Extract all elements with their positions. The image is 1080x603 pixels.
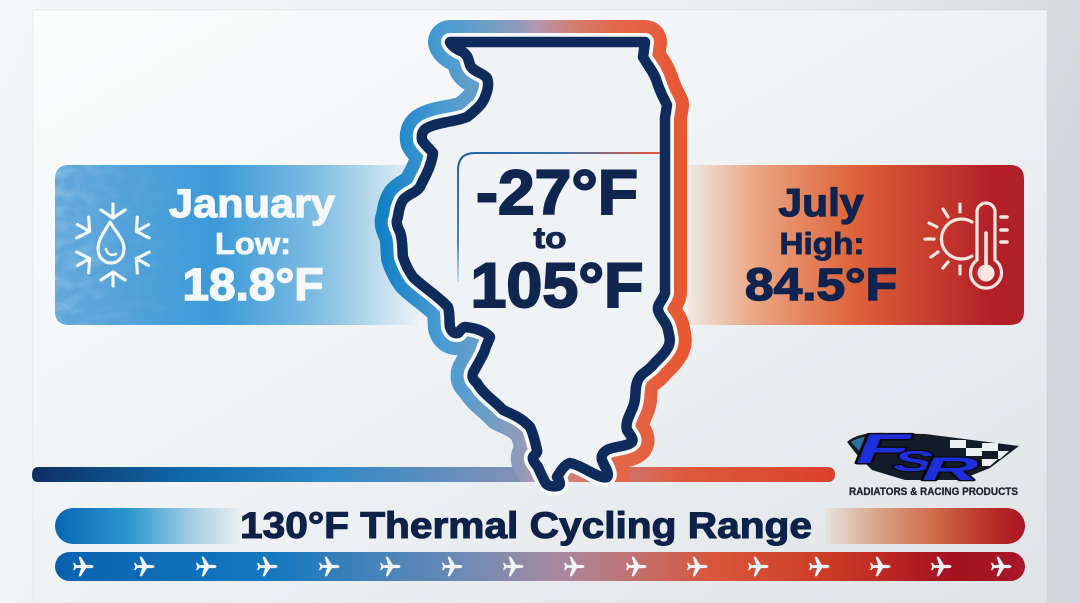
word to: to — [534, 222, 566, 255]
logo swoosh — [847, 433, 1019, 480]
title band: hot end — [825, 508, 1025, 544]
plane strip — [55, 552, 1025, 581]
bracket frame — [458, 153, 660, 282]
January label: January — [169, 182, 336, 226]
central temperature range box — [458, 153, 660, 321]
plane icons — [73, 557, 1012, 576]
letter R: R — [922, 451, 978, 487]
logo: FSR — [847, 425, 1019, 498]
icon: snowflake with water drop — [71, 204, 155, 286]
value 18.8°F: 18.8°F — [182, 259, 324, 310]
strip bar — [55, 552, 1025, 581]
panel: January low — [55, 165, 418, 325]
value -27°F: -27°F — [476, 158, 638, 228]
horizontal baseline: cold side — [32, 467, 532, 482]
white halo — [397, 42, 670, 486]
horizontal baseline: hot side — [610, 467, 835, 482]
map: Illinois outline — [397, 42, 670, 486]
checkered flag — [950, 440, 1009, 466]
Low label: Low: — [215, 226, 291, 261]
icon: sun and thermometer — [925, 203, 1007, 288]
July label: July — [778, 182, 864, 225]
frost texture — [55, 165, 144, 325]
logo letters — [856, 425, 978, 487]
navy state outline — [397, 42, 670, 486]
letter S: S — [893, 445, 933, 477]
title band — [55, 505, 1025, 546]
title band: cold end — [55, 508, 240, 544]
outer gradient band — [397, 42, 670, 486]
logo tagline: RADIATORS & RACING PRODUCTS — [849, 486, 1018, 498]
title text: 130°F Thermal Cycling Range — [240, 505, 812, 546]
value 105°F: 105°F — [470, 251, 644, 321]
panel background: cold gradient — [55, 165, 418, 325]
letter F: F — [856, 425, 912, 472]
High label: High: — [780, 226, 864, 261]
panel: July high — [688, 165, 1024, 325]
value 84.5°F: 84.5°F — [745, 259, 897, 310]
panel background: hot gradient — [688, 165, 1024, 325]
